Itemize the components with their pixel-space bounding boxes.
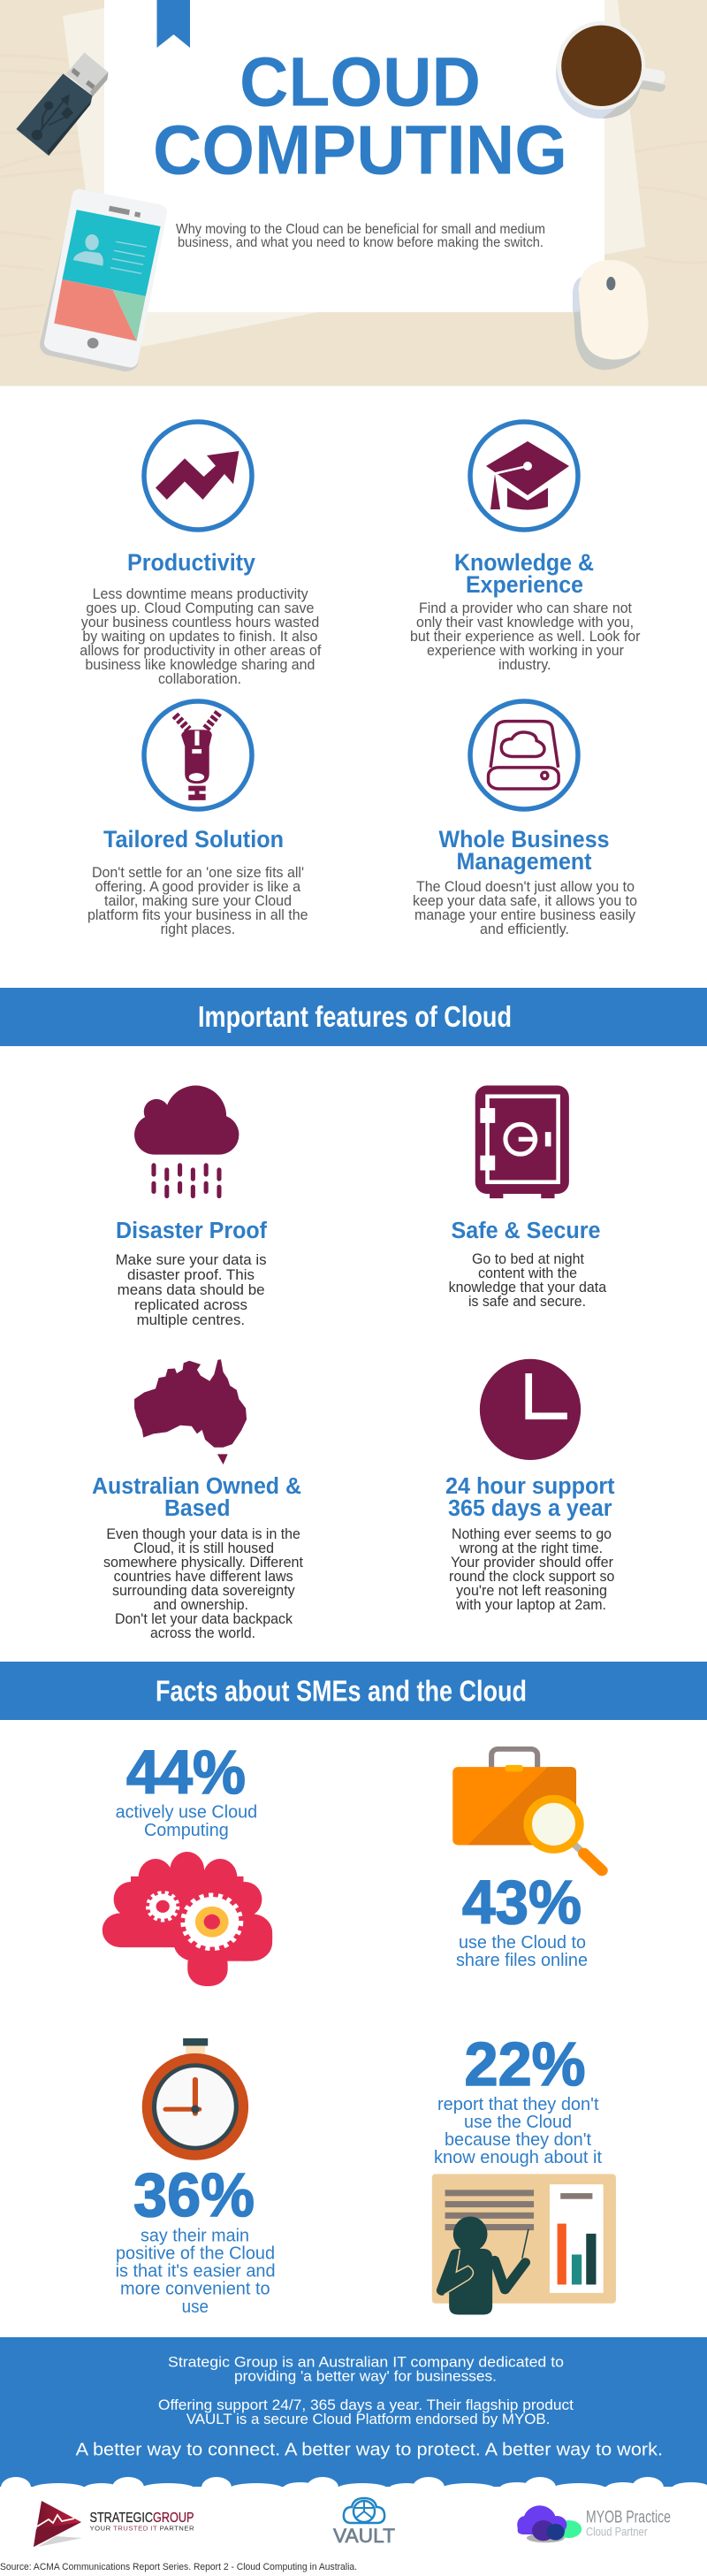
text: knowledge body: but their experience as well. Look for (410, 628, 641, 645)
icon: usb stick (16, 52, 108, 156)
text: company description (158, 2354, 574, 2427)
number: 22%: 22% (465, 2029, 585, 2098)
text: disaster proof body (116, 1252, 267, 1328)
text: knowledge body: only their vast knowledge with you, (416, 614, 634, 631)
heading: tailored: Tailored Solution (103, 826, 284, 852)
logo: vault: VAULT (333, 2525, 395, 2547)
icon: coffee cup (556, 21, 665, 118)
white paper (104, 0, 604, 312)
caption: 44%: Computing (144, 1821, 229, 1840)
logo: myob practice cloud partner: Cloud Partner (586, 2525, 648, 2539)
logo: myob practice cloud partner (517, 2505, 671, 2542)
caption: 22%: report that they don't (437, 2095, 599, 2114)
text: knowledge body (410, 600, 641, 673)
text: 24 hour support body: with your laptop at 2am. (455, 1597, 606, 1613)
text: disaster proof body: multiple centres. (137, 1312, 245, 1328)
text: 24 hour support body: Your provider should offer (451, 1555, 613, 1571)
tagline: A better way to connect. A better way to protect. A better way to work. (76, 2441, 663, 2460)
heading: 24 hour support: 24 hour support (445, 1474, 615, 1499)
heading: whole business: Management (456, 848, 592, 875)
text: australian owned body: surrounding data sovereignty (112, 1583, 295, 1599)
heading: australian owned: Based (164, 1496, 230, 1521)
text: whole business body: and efficiently. (480, 921, 569, 937)
logo: vault (333, 2498, 395, 2547)
subtitle: Why moving to the Cloud can be beneficial for small and medium (176, 222, 545, 237)
stat: 22 percent (432, 2029, 616, 2314)
card: safe and secure (449, 1086, 607, 1310)
text: tailored body: tailor, making sure your Cloud (104, 892, 292, 909)
logo: strategic group (34, 2501, 194, 2547)
card: 24 hour support (445, 1359, 615, 1613)
icon: australia map (134, 1359, 247, 1464)
number: 43%: 43% (462, 1868, 582, 1937)
panel: benefits (80, 422, 641, 937)
stat: 44 percent (103, 1738, 272, 1986)
back paper (63, 0, 645, 347)
text: australian owned body: and ownership. (154, 1597, 248, 1613)
heading: australian owned (92, 1474, 301, 1521)
banner: facts (0, 1662, 707, 1720)
text: safe and secure body: knowledge that your data (449, 1280, 607, 1296)
source note: Source: ACMA Communications Report Series. Report 2 - Cloud Computing in Australia. (0, 2562, 357, 2572)
text: disaster proof body: replicated across (134, 1297, 247, 1313)
card: productivity (80, 422, 322, 687)
text: 24 hour support body: you're not left reasoning (456, 1583, 607, 1599)
heading: safe and secure: Safe & Secure (451, 1219, 601, 1243)
panel: facts (103, 1738, 616, 2317)
heading: 24 hour support (445, 1474, 615, 1521)
subtitle: business, and what you need to know before making the switch. (178, 235, 544, 250)
heading: knowledge: Knowledge & (454, 549, 594, 576)
text: whole business body: manage your entire business easily (414, 906, 635, 923)
card: australian owned (92, 1359, 303, 1641)
text: tailored body: offering. A good provider is like a (95, 878, 301, 895)
logo: strategic group: YOUR TRUSTED IT PARTNER (90, 2525, 194, 2533)
panel: features (92, 1086, 615, 1641)
icon: clock (480, 1359, 581, 1460)
text: australian owned body: somewhere physically. Different (103, 1555, 303, 1571)
icon: growth arrow (144, 422, 252, 530)
title: COMPUTING (153, 110, 567, 189)
icon: graduation cap (470, 422, 578, 530)
heading: 24 hour support: 365 days a year (448, 1496, 612, 1521)
text: knowledge body: experience with working in your (427, 642, 624, 659)
text: 24 hour support body: wrong at the right time. (459, 1540, 603, 1556)
text: productivity body: collaboration. (158, 670, 241, 687)
heading: whole business: Whole Business (438, 826, 610, 852)
icon: rain cloud (134, 1086, 239, 1198)
bookmark ribbon (157, 0, 190, 48)
text: australian owned body (103, 1526, 303, 1641)
stat: 43 percent (452, 1749, 602, 1970)
title: CLOUD (239, 42, 481, 120)
text: 24 hour support body: Nothing ever seems to go (452, 1526, 612, 1542)
caption: 43%: use the Cloud to (459, 1933, 586, 1953)
text: tailored body: platform fits your business in all the (87, 906, 308, 923)
text: 24 hour support body: round the clock support so (449, 1569, 614, 1585)
icon: zipper (144, 701, 252, 809)
icon: briefcase and magnifier (452, 1749, 602, 1870)
caption: 36%: more convenient to (120, 2280, 270, 2299)
text: company description: VAULT is a secure Cloud Platform endorsed by MYOB. (186, 2411, 550, 2427)
text: company description: Strategic Group is an Australian IT company dedicated to (168, 2354, 564, 2371)
title (153, 42, 567, 189)
text: safe and secure body: is safe and secure. (468, 1294, 586, 1310)
text: australian owned body: countries have different laws (114, 1569, 293, 1585)
number: 36%: 36% (133, 2160, 255, 2229)
heading: australian owned: Australian Owned & (92, 1474, 301, 1499)
caption: 36%: say their main (141, 2227, 249, 2246)
caption: 43% (456, 1933, 588, 1970)
text: tailored body: right places. (161, 921, 235, 937)
logo: strategic group: STRATEGICGROUP (90, 2511, 194, 2526)
text: productivity body: by waiting on updates to finish. It also (82, 628, 317, 645)
caption: 22%: because they don't (445, 2130, 591, 2150)
caption: 44%: actively use Cloud (116, 1803, 257, 1823)
number: 44%: 44% (126, 1738, 246, 1807)
banner: important features: Important features of Cloud (198, 1000, 512, 1033)
caption: 36%: positive of the Cloud (116, 2244, 275, 2264)
text: disaster proof body: disaster proof. This (127, 1267, 255, 1283)
text: tailored body (87, 864, 308, 937)
heading: disaster proof: Disaster Proof (116, 1219, 267, 1243)
text: whole business body: keep your data safe, it allows you to (413, 892, 637, 909)
caption: 36%: use (182, 2297, 209, 2317)
text: disaster proof body: Make sure your data is (116, 1252, 267, 1268)
text: australian owned body: across the world. (150, 1625, 255, 1641)
icon: stopwatch (142, 2038, 248, 2160)
text: productivity body: Less downtime means productivity (93, 585, 308, 602)
text: productivity body: business like knowledge sharing and (85, 656, 315, 673)
text: disaster proof body: means data should be (118, 1282, 265, 1298)
text: productivity body: your business countless hours wasted (81, 614, 319, 631)
text: tailored body: Don't settle for an 'one size fits all' (92, 864, 304, 881)
card: whole business (413, 701, 637, 937)
card: tailored (87, 701, 308, 937)
heading: knowledge (454, 549, 594, 598)
icon: gears in cloud brain (103, 1852, 272, 1986)
banner: facts: Facts about SMEs and the Cloud (156, 1675, 527, 1707)
banner: important features (0, 988, 707, 1046)
logo: myob practice cloud partner: MYOB Practice (586, 2509, 671, 2527)
text: knowledge body: Find a provider who can share not (419, 600, 632, 616)
text: company description: Offering support 24/7, 365 days a year. Their flagship product (158, 2396, 574, 2413)
caption: 22% (434, 2095, 602, 2167)
panel: footer banner (0, 2337, 707, 2576)
icon: computer mouse (573, 260, 649, 370)
icon: cloud disk (470, 701, 578, 809)
icon: smartphone (40, 189, 167, 371)
text: safe and secure body: content with the (478, 1265, 577, 1281)
caption: 43%: share files online (456, 1951, 588, 1970)
heading: knowledge: Experience (466, 571, 583, 598)
text: productivity body (80, 585, 322, 687)
text: knowledge body: industry. (498, 656, 551, 673)
icon: presenter at board (432, 2174, 616, 2314)
text: australian owned body: Don't let your data backpack (115, 1611, 293, 1627)
card: disaster proof (116, 1086, 267, 1328)
caption: 36%: is that it's easier and (116, 2262, 276, 2282)
text: whole business body (413, 878, 637, 937)
text: productivity body: goes up. Cloud Computing can save (86, 600, 314, 616)
subtitle (176, 222, 545, 250)
panel: hero desk (0, 0, 707, 386)
text: australian owned body: Cloud, it is still housed (133, 1540, 274, 1556)
caption: 44% (116, 1803, 257, 1840)
caption: 36% (116, 2227, 276, 2317)
text: safe and secure body (449, 1251, 607, 1310)
icon: safe (475, 1086, 569, 1198)
heading: whole business (438, 826, 610, 875)
text: company description: providing 'a better way' for businesses. (234, 2368, 497, 2385)
caption: 22%: use the Cloud (464, 2113, 572, 2132)
caption: 22%: know enough about it (434, 2148, 602, 2167)
card: knowledge (410, 422, 641, 673)
text: productivity body: allows for productivity in other areas of (80, 642, 322, 659)
text: safe and secure body: Go to bed at night (472, 1251, 584, 1267)
heading: productivity: Productivity (127, 549, 255, 576)
text: whole business body: The Cloud doesn't just allow you to (416, 878, 635, 895)
panel: logos (34, 2498, 671, 2547)
stat: 36 percent (116, 2038, 276, 2317)
text: australian owned body: Even though your data is in the (106, 1526, 300, 1542)
text: 24 hour support body (449, 1526, 614, 1613)
